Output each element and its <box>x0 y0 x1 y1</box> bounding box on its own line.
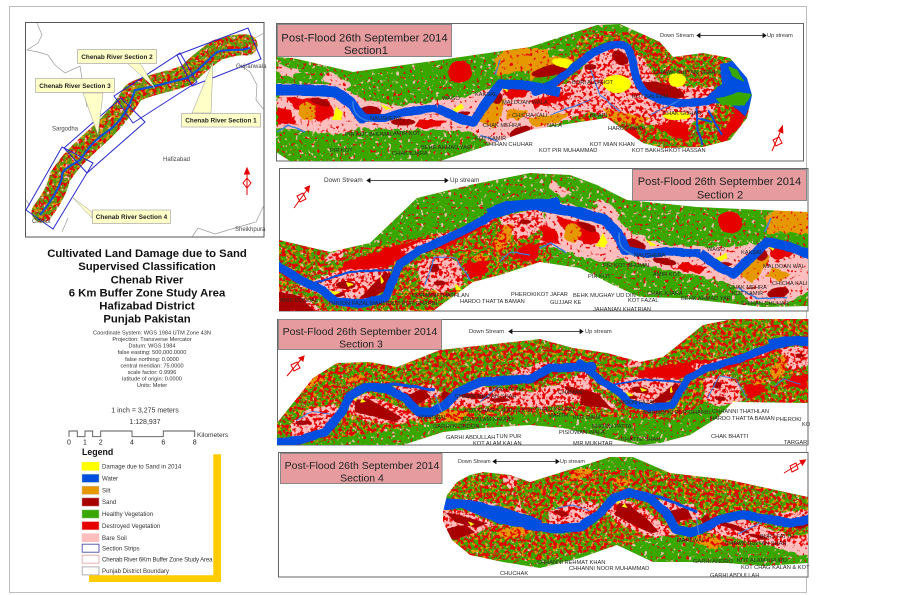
place names: section 2: ARIF CONDAL <box>280 298 318 304</box>
scale bar: 0 <box>67 440 71 446</box>
place names: section 1: HARDO BAKH <box>608 126 646 132</box>
place names: section 3: KHATTE SHAH <box>621 437 660 443</box>
stream direction arrow <box>469 329 612 335</box>
place names: section 1: KOT MIAN KHAN <box>590 142 635 148</box>
heading: section 2: Section 2 <box>697 189 743 201</box>
title: Cultivated Land Damage due to Sand <box>47 248 247 260</box>
place names: section 3 <box>419 387 811 447</box>
place names: section 1: WAGO <box>442 96 460 102</box>
projection details: Datum: WGS 1984 <box>129 344 175 350</box>
place names: section 4: CHHANNI REHMAT KHAN <box>537 560 605 566</box>
panel: section 2 map <box>279 168 808 312</box>
place names: section 2: MALDOAN WAL <box>763 264 805 270</box>
panel: location inset map <box>25 22 267 237</box>
heading: section 1 <box>278 24 452 57</box>
place names: section 3: GARHI ABDULLAH <box>446 435 495 441</box>
district boundaries <box>26 23 264 237</box>
legend <box>82 447 213 575</box>
legend frame accent <box>89 454 221 582</box>
title: Hafizabad District <box>99 300 195 312</box>
stream direction arrow: Up stream <box>585 329 612 335</box>
projection details: false easting: 500,000.0000 <box>118 350 186 356</box>
place names: section 3: CHAWK SULTAN SHAH <box>455 394 517 400</box>
place names: section 2: KOT KAMIR <box>732 291 763 297</box>
place names: section 2 <box>280 247 808 313</box>
stream direction arrow: Down Stream <box>469 329 504 335</box>
place names: section 1: KAKSAL <box>475 92 497 98</box>
place names in inset: Gujranwala <box>236 64 267 70</box>
heading: section 4 <box>280 454 442 485</box>
stream direction arrow: Up stream <box>450 177 479 184</box>
legend: Sand <box>102 499 116 506</box>
heading: section 1: Post-Flood 26th September 2014 <box>281 32 448 44</box>
legend: Destroyed Vegetation <box>102 523 160 530</box>
place names: section 4: CHAWK SULTAN SHAH <box>725 541 787 547</box>
place names: section 1: CHAK GOHAR <box>663 111 701 117</box>
place names: section 3: KOT DAIM <box>573 415 601 421</box>
place names: section 1: KOT HASSAN <box>669 148 706 154</box>
projection details: central meridian: 75.0000 <box>120 364 184 370</box>
panel: section 3 map <box>277 319 810 446</box>
place names: section 3: CHAK BHATTI <box>711 434 749 440</box>
place names: section 4: KOT CHAG KALAN & KOT <box>741 565 810 571</box>
projection details: Coordinate System: WGS 1984 UTM Zone 43N <box>93 331 211 337</box>
icon: north arrow <box>294 186 310 208</box>
heading: section 2 <box>632 170 806 201</box>
scale bar: Kilometers <box>197 432 229 439</box>
place names: section 3: HARDO THATTA BAMAN <box>710 416 775 422</box>
legend: Damage due to Sand in 2014 <box>102 464 182 470</box>
place names: section 3: PISIOWAN WALA <box>559 430 605 436</box>
legend: Silt <box>102 488 111 494</box>
projection details: scale factor: 0.9996 <box>128 370 176 376</box>
section strips <box>26 28 261 229</box>
legend: Healthy Vegetation <box>102 511 153 518</box>
stream direction arrow: Up stream <box>767 33 793 39</box>
projection details: latitude of origin: 0.0000 <box>122 377 182 383</box>
callouts: river sections: Chenab River Section 4 <box>96 214 168 221</box>
legend: Chenab River 6Km Buffer Zone Study Area <box>102 556 213 564</box>
place names: section 3: TUN PUR <box>496 434 521 440</box>
place names: section 1: PIR KOT BHUMAL <box>345 132 393 138</box>
place names: section 3: BURJ FATTH <box>489 387 523 393</box>
place names: section 1: MALDOAN WALA <box>502 100 548 106</box>
place names: section 1: CHAWK SULTAN SHAH <box>654 70 716 76</box>
place names: section 4: GARHI ANDRO <box>693 559 733 565</box>
place names in inset: Sargodha <box>52 126 79 132</box>
legend: Legend <box>82 447 113 457</box>
place names: section 4: GARHI ABDULLAH <box>710 573 759 579</box>
place names: section 2: PIR KOT BHUMAL <box>603 263 651 269</box>
river in inset <box>40 48 250 215</box>
stream direction arrow: Up stream <box>560 459 585 465</box>
place names: section 1: BEHE AHMAD YAR <box>421 145 471 151</box>
icon: north arrow <box>772 126 783 151</box>
strip of classified land <box>32 34 258 222</box>
place names: section 2: CHICHA KALI <box>772 281 808 287</box>
place names: section 3: GARHI N ORDON <box>433 424 479 430</box>
map scale text: 1:128,937 <box>129 419 161 426</box>
place names: section 2: HARDO THATTA BAMAN <box>460 299 525 305</box>
place names: section 3: PHEROKI <box>776 417 802 423</box>
place names: section 1: PIR KOT <box>330 148 353 154</box>
place names: section 2: NAUSHERA <box>634 253 666 259</box>
heading: section 3 <box>278 320 442 350</box>
place names: section 4: MAHI WAL <box>677 538 705 544</box>
place names: section 2: CHAK KJARA <box>647 291 683 297</box>
projection details <box>93 331 211 389</box>
stream direction arrow: Down Stream <box>458 459 491 465</box>
heading: section 3: Post-Flood 26th September 2014 <box>283 326 437 338</box>
icon: north arrow <box>243 168 251 195</box>
icon: north arrow <box>784 460 806 473</box>
place names: section 2: KOT JAFAR <box>537 292 568 298</box>
place names: section 3: GHAZI KHURD <box>535 407 574 413</box>
place names: section 1: KOT SALEEM <box>632 94 669 100</box>
place names: section 2: AMIR KOT <box>653 272 681 278</box>
place names in inset: Sheikhpura <box>235 227 266 233</box>
place names: section 4: BURJ FATTH <box>760 534 794 540</box>
place names: section 2: WAGO <box>707 247 725 253</box>
classified land section 4 <box>443 457 808 568</box>
classified land section 1 <box>276 24 752 161</box>
scale bar <box>67 431 229 446</box>
stream direction arrow: Down Stream <box>324 177 363 184</box>
place names: section 3: KOT CHAG KALAN & KOT <box>465 408 534 414</box>
place names: section 2: JAHANIAN KHATRIAN <box>593 307 651 313</box>
place names: section 1: NAUSHERA <box>370 116 402 122</box>
map scale text: 1 inch = 3,275 meters <box>111 407 179 414</box>
place names: section 1: KOT PIR MUHAMMAD <box>539 148 597 154</box>
stream direction arrow <box>458 459 585 465</box>
place names: section 3: BHOON PATTA <box>592 424 632 430</box>
place names: section 3: MIR MUKHTAR <box>573 441 613 447</box>
place names: section 3: CHHANNI THATHLAN <box>712 409 769 415</box>
classified land section 3 <box>277 319 808 445</box>
heading: section 2: Post-Flood 26th September 2014 <box>638 176 801 188</box>
place names: section 2: CHHANNI THATHLAN <box>412 293 469 299</box>
place names: section 3: DHOON FAZAL <box>616 400 656 406</box>
heading: section 4: Post-Flood 26th September 2014 <box>285 460 439 472</box>
place names: section 3: TARGARI <box>784 440 809 446</box>
place names: section 1: CHIHAN CHUHAR <box>485 142 533 148</box>
stream direction arrow: Down Stream <box>660 33 694 39</box>
place names: section 1: KOT KAMIR <box>475 136 506 142</box>
heading: section 1: Section1 <box>344 45 388 57</box>
stream direction arrow <box>324 177 479 184</box>
place names: section 3: KOT ALAM KALAN <box>473 441 522 447</box>
scale bar: 4 <box>130 440 134 446</box>
place names: section 4: CHHANNI NOOR MUHAMMAD <box>569 566 649 572</box>
stream direction arrow <box>660 33 793 39</box>
place names: section 4 <box>500 534 810 579</box>
place names: section 1: CHICHA KALI <box>512 113 548 119</box>
place names: section 1: BORI ALLAHOT <box>572 80 614 86</box>
projection details: Projection: Transverse Mercator <box>112 337 192 343</box>
place names: section 3: MAHI WAL <box>419 415 447 421</box>
panel: section 1 map <box>270 15 810 165</box>
title: Supervised Classification <box>78 261 216 273</box>
legend: Section Strips <box>102 546 140 552</box>
place names: section 1: AMIR KOT <box>393 131 421 137</box>
heading: section 4: Section 4 <box>340 473 384 485</box>
projection details: Units: Meter <box>137 383 167 389</box>
place names: section 4: KOT ALAM KHURD <box>737 558 787 564</box>
legend: Punjab District Boundary <box>102 568 170 575</box>
callouts: river sections <box>36 50 260 224</box>
place names: section 1 <box>330 70 716 157</box>
place names: section 2: PHEROKI <box>511 292 537 298</box>
place names: section 1: NALA <box>547 123 562 129</box>
title: Chenab River <box>111 274 184 286</box>
place names: section 2: KOT FAZAL <box>628 298 659 304</box>
place names: section 2: GUJJAR KE <box>550 300 581 306</box>
icon: north arrow <box>287 356 304 376</box>
map scale text <box>111 407 179 426</box>
scale bar: 2 <box>99 440 103 446</box>
place names in inset: Chiniot <box>32 219 51 225</box>
place names: section 3: CHAMAN <box>558 390 583 396</box>
panel: section 4 map <box>278 452 810 578</box>
place names: section 3: KO <box>802 422 811 428</box>
place names: section 3: MARTH <box>548 413 568 419</box>
place names: section 2: DHOON FAZAL <box>329 301 369 307</box>
place names: section 2: CHAK MEHRA <box>729 285 767 291</box>
place names: section 4: CHUCHAK <box>500 571 528 577</box>
place names: section 2: KAKSAL <box>741 250 763 256</box>
projection details: false northing: 0.0000 <box>125 357 179 363</box>
place names: section 1: KOT BAKHSH <box>632 148 669 154</box>
callouts: river sections: Chenab River Section 2 <box>81 54 153 61</box>
place names in inset: Hafizabad <box>163 157 190 163</box>
heading: section 3: Section 3 <box>339 338 383 350</box>
title: 6 Km Buffer Zone Study Area <box>69 288 226 300</box>
place names: section 2: PIR KOT <box>588 274 611 280</box>
place names: section 1: CHAK KJARA <box>392 151 428 157</box>
title: Punjab Pakistan <box>103 314 191 326</box>
place names: section 3: KOT ALAM KHURD <box>463 417 513 423</box>
place names in inset <box>32 64 267 233</box>
scale bar: 1 <box>83 440 87 446</box>
title <box>47 248 247 326</box>
place names: section 3: MAHMOOD PUR GHARBI <box>643 410 711 416</box>
callouts: river sections: Chenab River Section 1 <box>185 118 257 124</box>
callouts: river sections: Chenab River Section 3 <box>39 83 111 90</box>
scale bar: 6 <box>161 440 165 446</box>
place names: section 1: BHARI <box>590 113 608 119</box>
place names: section 2: BEHK AHMAD YAR <box>681 296 731 302</box>
place names: section 2: MAHMOOD PUR GHARBI <box>370 301 438 307</box>
scale bar: 8 <box>193 440 197 446</box>
classified land section 2 <box>279 173 808 311</box>
legend: Water <box>102 476 118 482</box>
legend: Bare Soil <box>102 535 127 542</box>
place names: section 2: BEHK MUGHAY UD DIN <box>573 293 636 299</box>
place names: section 1: CHAK MEHRA <box>483 123 521 129</box>
place names: section 2: CHIHAN CHUHAR <box>741 301 789 307</box>
